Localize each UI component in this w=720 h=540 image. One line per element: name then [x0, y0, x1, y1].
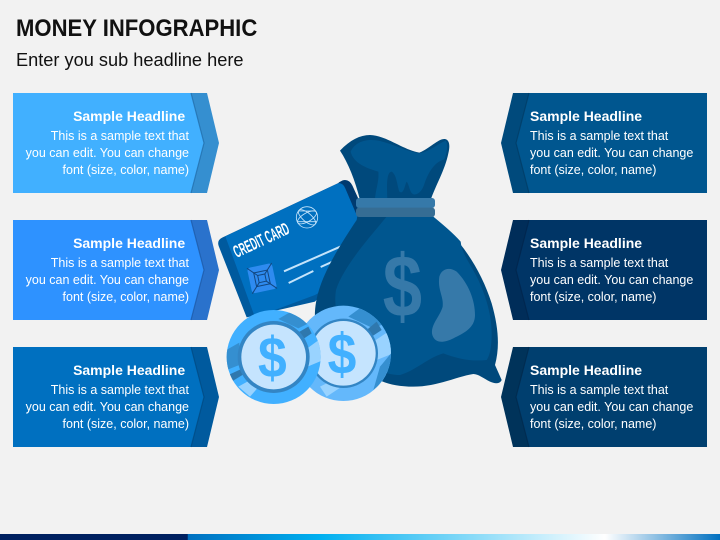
text: left 1: Sample Headline	[73, 108, 185, 124]
bag ties	[356, 198, 435, 208]
text: left 2: Sample Headline	[73, 235, 185, 251]
text: right 3: you can edit. You can change	[530, 400, 693, 414]
text: right 1: Sample Headline	[530, 108, 642, 124]
text: right 2: Sample Headline	[530, 235, 642, 251]
text: right 1	[530, 108, 693, 177]
title: MONEY INFOGRAPHIC	[16, 15, 257, 42]
text: left 1	[26, 108, 189, 177]
panel: left 1	[13, 93, 219, 193]
text: left 2: font (size, color, name)	[63, 290, 189, 304]
text: left 2	[26, 235, 189, 304]
text: right 3: This is a sample text that	[530, 383, 668, 397]
text: right 3: font (size, color, name)	[530, 417, 656, 431]
card label: CREDIT CARD	[230, 219, 292, 261]
text: right 1: you can edit. You can change	[530, 146, 693, 160]
icon: left coin: $	[258, 325, 287, 390]
subtitle: Enter you sub headline here	[16, 50, 244, 70]
icon: right coin: $	[328, 322, 356, 386]
text: right 2: font (size, color, name)	[530, 290, 656, 304]
card lines	[284, 245, 343, 283]
text: left 2: you can edit. You can change	[26, 273, 189, 287]
panel: left 3	[13, 347, 219, 447]
text: right 2: This is a sample text that	[530, 256, 668, 270]
text: right 1: font (size, color, name)	[530, 163, 656, 177]
panel: right 3	[501, 347, 707, 447]
panel: right 1	[501, 93, 707, 193]
bottom bar	[0, 534, 720, 540]
icon: money bag	[315, 135, 502, 387]
text: right 3: Sample Headline	[530, 362, 642, 378]
text: left 3: font (size, color, name)	[63, 417, 189, 431]
bag patch	[432, 269, 475, 342]
text: right 2: you can edit. You can change	[530, 273, 693, 287]
bag dollar sign: $	[383, 237, 422, 335]
text: left 3	[26, 362, 189, 431]
icon: right coin	[306, 306, 391, 401]
text: left 3: This is a sample text that	[51, 383, 189, 397]
text: left 3: you can edit. You can change	[26, 400, 189, 414]
text: right 1: This is a sample text that	[530, 129, 668, 143]
central illustration	[218, 135, 502, 404]
text: left 3: Sample Headline	[73, 362, 185, 378]
text: left 1: This is a sample text that	[51, 129, 189, 143]
icon: credit card	[218, 180, 377, 317]
icon: globe	[296, 207, 318, 228]
text: left 1: font (size, color, name)	[63, 163, 189, 177]
panel: right 2	[501, 220, 707, 320]
icon: left coin	[223, 308, 323, 404]
text: left 1: you can edit. You can change	[26, 146, 189, 160]
card chip	[247, 263, 277, 294]
panel: left 2	[13, 220, 219, 320]
text: left 2: This is a sample text that	[51, 256, 189, 270]
text: right 2	[530, 235, 693, 304]
text: right 3	[530, 362, 693, 431]
